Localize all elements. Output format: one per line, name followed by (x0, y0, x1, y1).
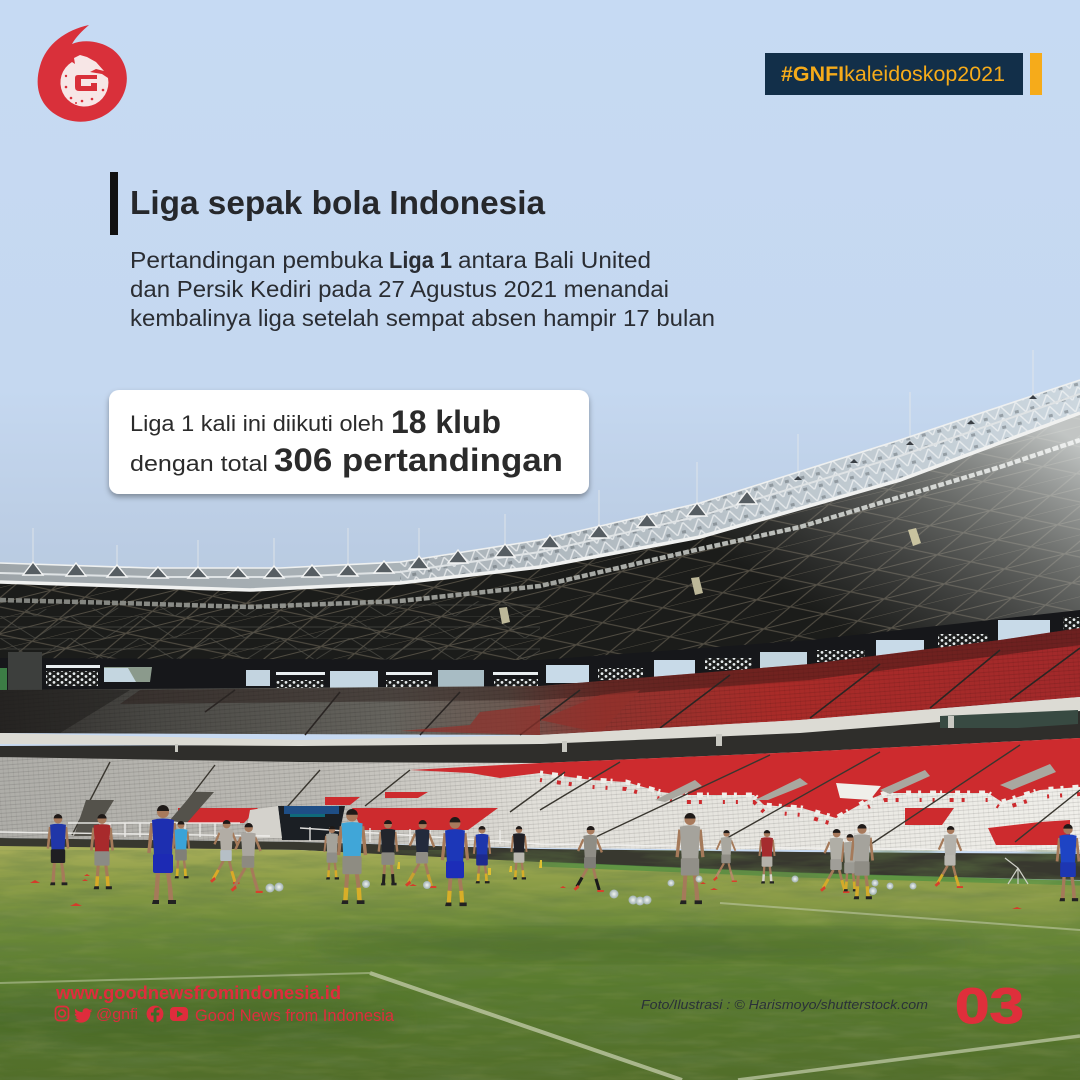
player 11 (442, 817, 468, 906)
social handle: @gnfi (96, 1006, 138, 1023)
page number: 03 (955, 978, 1024, 1034)
player 3 (149, 805, 177, 904)
stadium roof underside (0, 413, 1080, 692)
callout card (109, 390, 589, 494)
stand stairs (74, 764, 1056, 836)
footer website: www.goodnewsfromindonesia.id (55, 982, 341, 1003)
body text: antara Bali United (458, 247, 651, 273)
camera tripod (1005, 858, 1028, 884)
players (48, 805, 1079, 906)
player 9 (379, 820, 397, 885)
grass pitch (0, 846, 1080, 1080)
body text (130, 247, 715, 331)
roof lights (499, 528, 921, 624)
player 17 (759, 830, 775, 883)
perimeter wall (0, 838, 1080, 880)
player 5 (210, 820, 239, 884)
players tunnel (245, 806, 345, 840)
lower stands red seats (178, 738, 1080, 845)
hashtag tag: #GNFIkaleidoskop2021 (781, 63, 1005, 86)
white roof ring (0, 380, 1080, 590)
roof light strip (0, 440, 1080, 607)
callout card: 306 pertandingan (274, 442, 563, 478)
footballs (266, 876, 916, 906)
tag accent bar (1030, 53, 1042, 95)
body text: Liga 1 (389, 247, 452, 273)
player 16 (713, 830, 737, 882)
stadium photo (0, 350, 1080, 1080)
title: Liga sepak bola Indonesia (130, 184, 546, 221)
player 6 (230, 823, 263, 893)
player 8 (339, 809, 365, 904)
footer social row (56, 1006, 395, 1025)
player 1 (48, 814, 68, 885)
roof poles (33, 350, 1033, 567)
player 4 (173, 821, 189, 878)
pitch lines (0, 903, 1080, 1080)
icon: youtube (170, 1007, 188, 1021)
player 7 (324, 826, 340, 879)
dark band with roof openings (0, 610, 1080, 714)
upper stands (0, 628, 1080, 735)
player 22 (1057, 824, 1079, 901)
background: sky (0, 0, 1080, 670)
icon: twitter (74, 1008, 92, 1023)
icon: facebook (147, 1006, 163, 1022)
stand aisles (72, 745, 1080, 848)
concourse white band and dark level (0, 697, 1080, 766)
player 20 (851, 824, 873, 899)
lower stands white seats (0, 738, 1080, 852)
callout card: 18 klub (391, 404, 501, 440)
logo (38, 25, 127, 122)
player 19 (842, 834, 858, 891)
body text: dan Persik Kediri pada 27 Agustus 2021 menandai (130, 276, 669, 302)
roof ring nodes (23, 491, 757, 578)
player 14 (574, 826, 604, 892)
photo credit: Foto/Ilustrasi : © Harismoyo/shutterstock.com (641, 997, 928, 1012)
icon: instagram (56, 1006, 68, 1020)
callout card: Liga 1 kali ini diikuti oleh (130, 411, 384, 436)
page name: Good News from Indonesia (195, 1006, 395, 1025)
player 21 (934, 826, 963, 888)
player 10 (405, 820, 436, 888)
body text: Pertandingan pembuka (130, 247, 383, 273)
callout card: dengan total (130, 451, 268, 476)
player 13 (511, 826, 527, 879)
hashtag tag (765, 53, 1023, 95)
title accent bar (110, 172, 118, 235)
player 18 (820, 829, 849, 893)
logo garuda ring (60, 55, 108, 107)
player 2 (91, 814, 113, 889)
pitch side railing (0, 823, 1080, 851)
body text: kembalinya liga setelah sempat absen hampir 17 bulan (130, 305, 715, 331)
player 15 (677, 813, 703, 904)
training cones (30, 858, 1022, 909)
player 12 (474, 826, 490, 883)
